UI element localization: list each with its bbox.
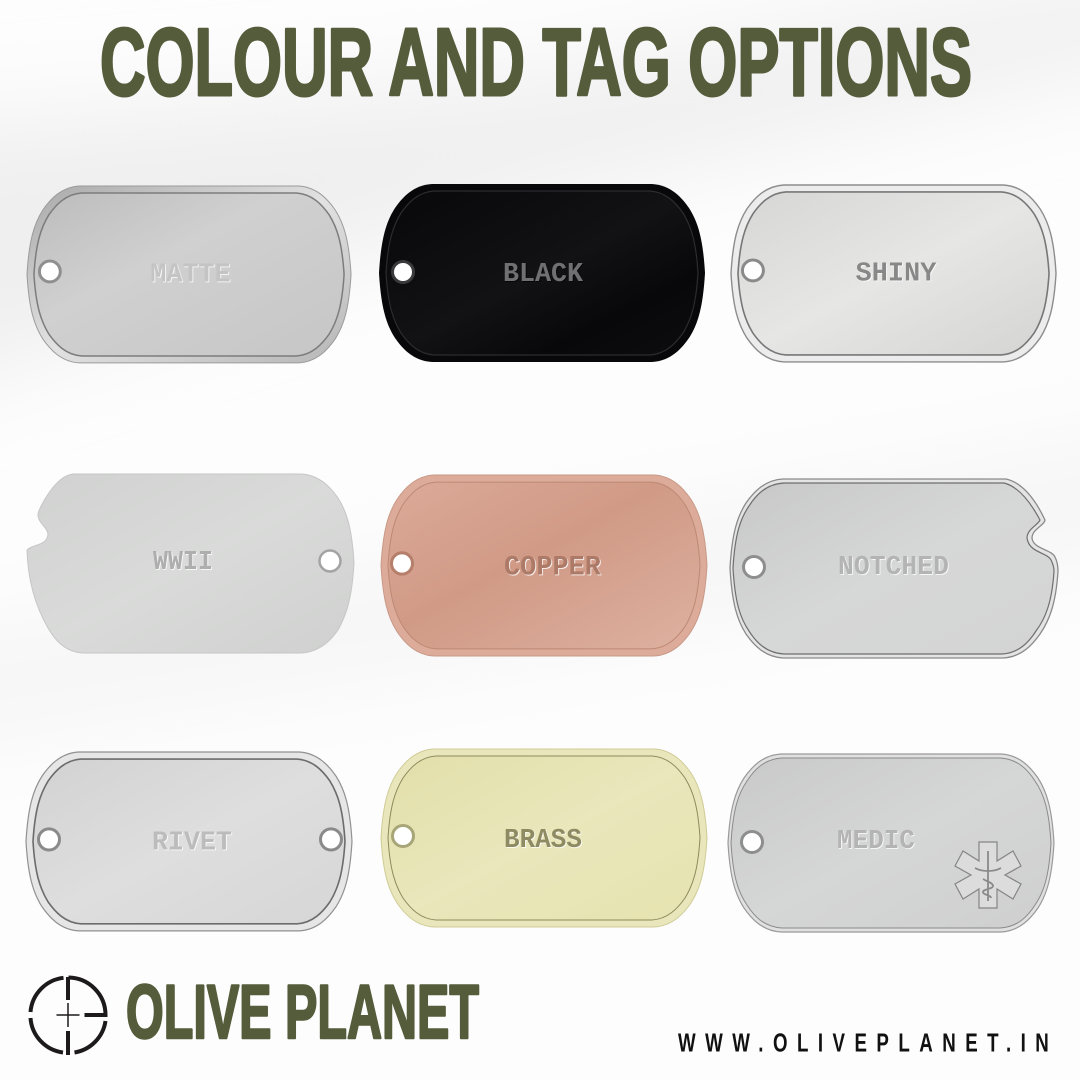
tag: medic — [728, 754, 1054, 932]
icon: star of life — [955, 842, 1021, 908]
logo mark — [30, 977, 106, 1055]
label: MATTE: MATTE — [150, 260, 231, 290]
tag: notched — [730, 479, 1058, 658]
tag: WWII — [27, 474, 354, 653]
label: BLACK: BLACK — [503, 260, 584, 290]
label: COPPER: COPPER — [504, 552, 602, 584]
tag: copper — [381, 475, 707, 656]
tag: brass — [381, 749, 707, 927]
label: NOTCHED: NOTCHED — [838, 553, 949, 583]
website url: WWW.OLIVEPLANET.IN — [678, 1027, 1049, 1057]
tag: black — [379, 184, 705, 362]
tag: matte — [27, 186, 351, 363]
label: MEDIC: MEDIC — [837, 827, 915, 857]
label: RIVET: RIVET — [152, 827, 232, 859]
label: WWII: WWII — [153, 548, 213, 578]
label: SHINY: SHINY — [856, 259, 937, 289]
tag: rivet — [26, 752, 352, 931]
tag: shiny — [731, 185, 1056, 362]
brand name: OLIVE PLANET — [126, 970, 479, 1055]
label: BRASS: BRASS — [504, 826, 582, 856]
